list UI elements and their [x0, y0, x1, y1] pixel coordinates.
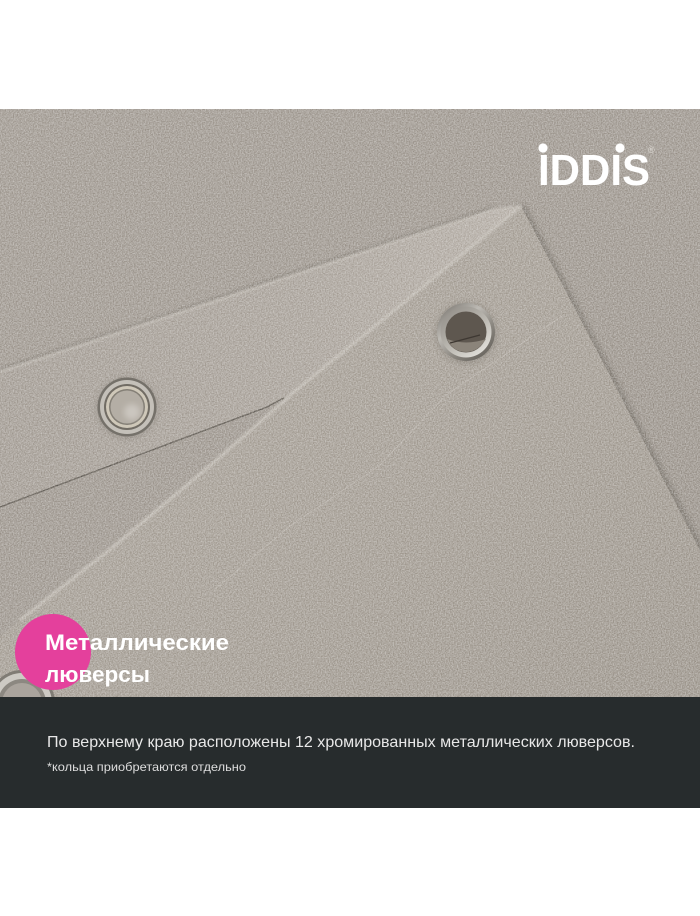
- right edge shadow: [521, 206, 700, 562]
- logo: IDDIS: ®: [648, 145, 655, 155]
- strip cast shadow: [0, 207, 493, 369]
- footnote: *кольца приобретаются отдельно: [47, 760, 246, 774]
- icon: grommet bottom left: [0, 670, 54, 697]
- folded top strip: [0, 205, 519, 442]
- heading: люверсы: [45, 662, 150, 687]
- background fabric: [0, 109, 700, 637]
- heading: Металлические: [45, 630, 229, 655]
- logo: IDDIS: IDDIS: [538, 146, 650, 195]
- icon: grommet left: [96, 377, 158, 439]
- front panel: [19, 205, 700, 622]
- caption band: [0, 697, 700, 808]
- infographic scene: [0, 109, 700, 808]
- pink circle badge: [15, 614, 91, 690]
- body text: По верхнему краю расположены 12 хромированных металлических люверсов.: [47, 734, 635, 751]
- fabric grain: [0, 109, 700, 697]
- icon: grommet right: [435, 302, 497, 364]
- fabric photo: [0, 109, 700, 736]
- lining under strip: [0, 398, 284, 508]
